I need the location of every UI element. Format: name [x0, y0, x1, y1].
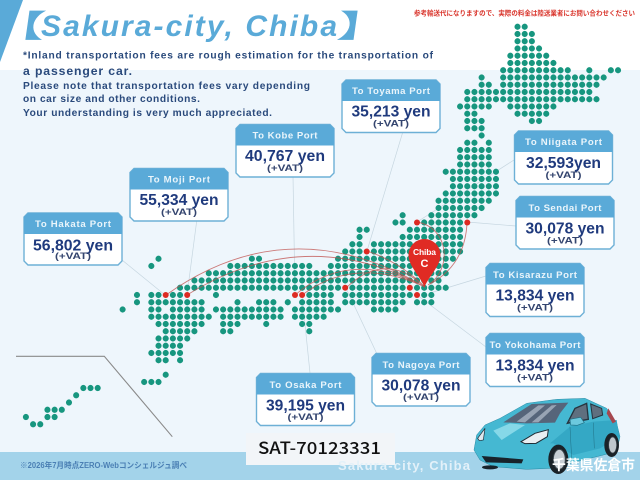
fee box: Sendai	[516, 196, 614, 249]
fee box: Osaka: 39,195 yen	[266, 398, 345, 414]
explanatory note: *Inland transportation fees are rough estimation for the transportation of	[23, 50, 434, 62]
explanatory note: Your understanding is very much appreciated.	[23, 108, 272, 119]
white header band	[0, 0, 640, 70]
leader lines from fee boxes to ports	[122, 133, 516, 373]
fee box: Sendai: (+VAT)	[547, 236, 583, 246]
fee box: Moji: To Moji Port	[148, 174, 211, 186]
fee box: Niigata: To Niigata Port	[525, 137, 603, 148]
fee box: Nagoya: To Nagoya Port	[382, 360, 460, 371]
Chiba location pin: C	[421, 258, 429, 270]
fee box: Yokohama	[486, 334, 584, 386]
fee box: Nagoya	[372, 354, 470, 406]
fee box: Kobe	[236, 124, 334, 177]
explanatory note: a passenger car.	[23, 64, 132, 78]
fee box: Osaka: (+VAT)	[288, 412, 324, 423]
fee box: Niigata: 32,593yen	[526, 155, 601, 172]
stock number plate: SAT-70123331	[258, 434, 381, 459]
decorative inset divider for Okinawa	[16, 356, 172, 437]
fee box: Kobe: (+VAT)	[267, 163, 303, 174]
fee box: Osaka	[256, 374, 354, 426]
fee box: Nagoya: (+VAT)	[403, 392, 439, 403]
transport route arcs	[166, 222, 467, 295]
fee box: Sendai: 30,078 yen	[526, 220, 604, 238]
fee box: Hakata	[24, 213, 122, 265]
fee box: Moji: 55,334 yen	[140, 192, 218, 209]
okinawa dots	[26, 388, 98, 424]
Japanese place name: 千葉県佐倉市	[552, 455, 635, 475]
explanatory note: on car size and other conditions.	[23, 94, 200, 105]
dot map of Japan	[26, 27, 618, 424]
title: 】	[335, 2, 394, 46]
Chiba location pin: Chiba	[413, 247, 436, 257]
fee box: Toyama: To Toyama Port	[352, 86, 431, 97]
explanatory note: Please note that transportation fees vary depending	[23, 81, 310, 92]
fee box: Yokohama: (+VAT)	[517, 372, 553, 384]
red disclaimer: 参考輸送代になりますので、実際の料金は陸送業者にお問い合わせください	[414, 8, 635, 18]
stock number plate	[246, 433, 395, 465]
fee box: Yokohama: To Yokohama Port	[490, 340, 581, 351]
fee box: Hakata: 56,802 yen	[33, 238, 113, 254]
fee box: Osaka: To Osaka Port	[270, 380, 342, 391]
explanatory note	[23, 50, 434, 119]
fee box: Kobe: 40,767 yen	[245, 148, 325, 165]
fee box: Kobe: To Kobe Port	[252, 130, 318, 142]
Chiba location pin	[408, 239, 440, 287]
fee box: Niigata: (+VAT)	[546, 170, 582, 181]
car illustration	[474, 398, 620, 474]
fee box: Toyama: (+VAT)	[373, 118, 409, 130]
fee box: Kisarazu: (+VAT)	[517, 302, 553, 314]
bottom bar	[0, 452, 640, 480]
port markers	[163, 220, 470, 298]
corner accent	[0, 0, 23, 62]
survey source note: ※2026年7月時点ZERO-Webコンシェルジュ調べ	[20, 460, 187, 470]
fee box: Sendai: To Sendai Port	[528, 203, 602, 214]
fee box: Toyama: 35,213 yen	[352, 104, 430, 120]
fee box: Moji	[130, 168, 228, 221]
fee box: Niigata	[514, 131, 612, 184]
location caption: Sakura-city, Chiba	[338, 458, 471, 473]
fee box: Moji: (+VAT)	[161, 207, 197, 218]
fee box: Toyama	[342, 80, 440, 132]
fee box: Hakata: To Hakata Port	[35, 219, 112, 230]
fee box: Hakata: (+VAT)	[55, 251, 91, 262]
fee box: Kisarazu: To Kisarazu Port	[493, 270, 578, 281]
fee box: Kisarazu	[486, 264, 584, 316]
fee box: Nagoya: 30,078 yen	[382, 378, 460, 394]
title: Sakura-city, Chiba	[41, 10, 337, 43]
fee box: Kisarazu: 13,834 yen	[496, 288, 574, 304]
fee box: Yokohama: 13,834 yen	[496, 358, 574, 374]
title	[0, 2, 394, 46]
